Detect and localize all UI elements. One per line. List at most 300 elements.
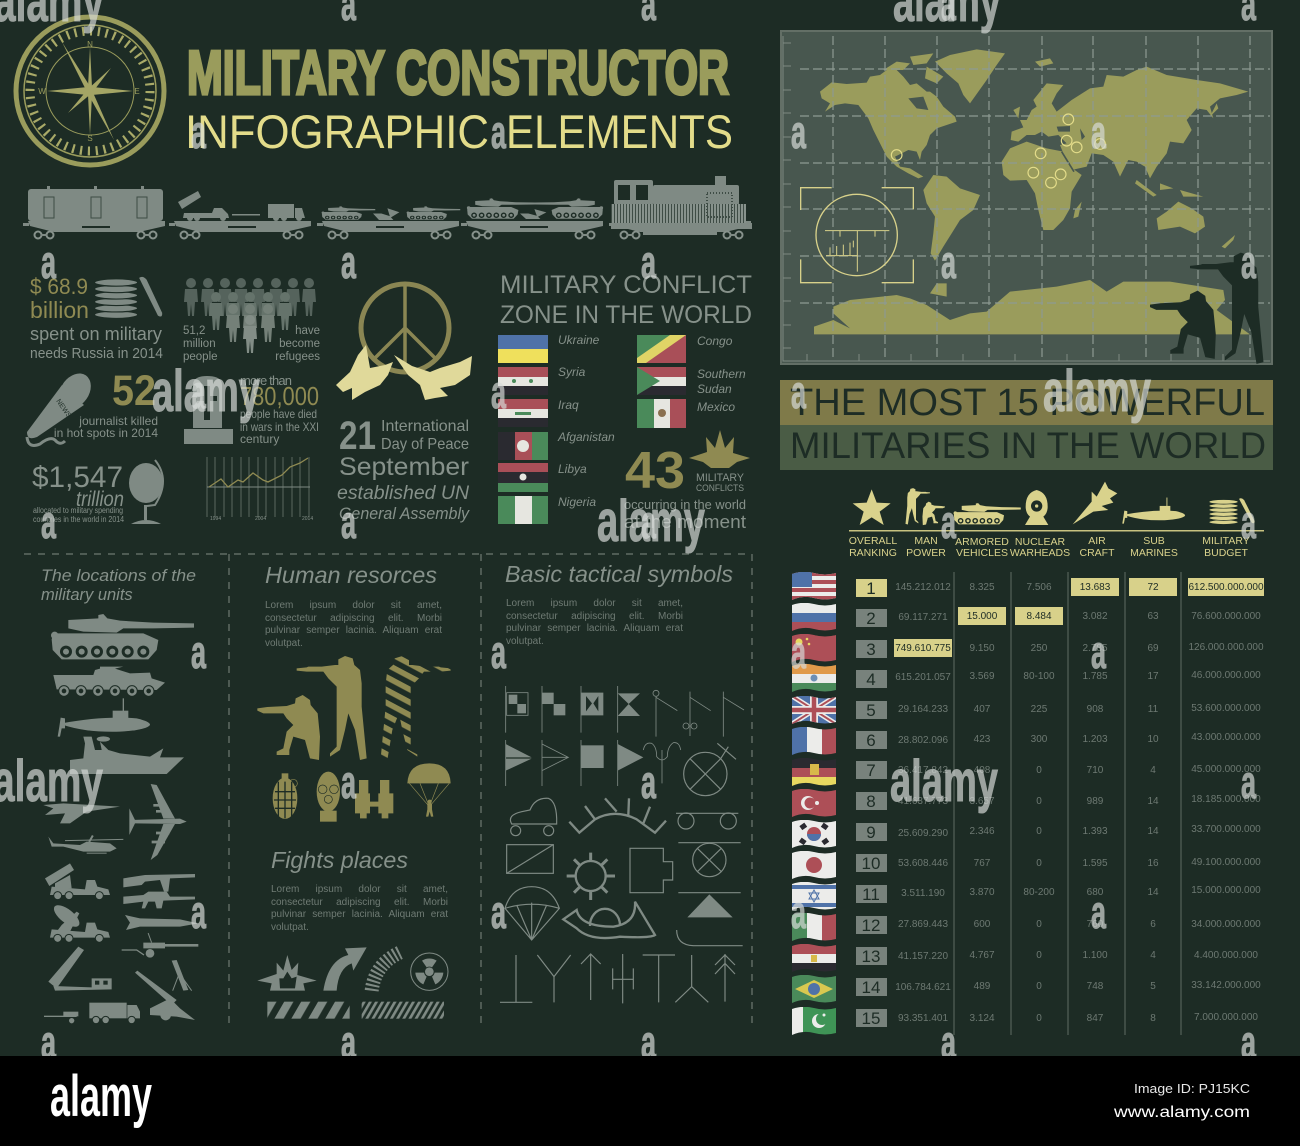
row 8: Turkey: 41.637.773 xyxy=(898,796,948,807)
icon: submarine xyxy=(58,698,150,737)
text: lorem ipsum xyxy=(271,884,448,936)
footer logo: alamy xyxy=(50,1064,152,1129)
solid triangle symbol xyxy=(687,894,733,917)
row 13: Egypt: 41.157.220 xyxy=(898,951,948,962)
large watermarks: alamy xyxy=(1043,359,1151,424)
small watermarks: a xyxy=(191,626,206,678)
row 8: Turkey: 3.657 xyxy=(969,796,995,807)
flag labels: Southern xyxy=(697,367,746,381)
stat: 1,547 trillion: allocated to military spending xyxy=(33,506,123,515)
small watermarks: a xyxy=(1091,886,1106,938)
stat: 780,000 died: in wars in the XXI xyxy=(240,420,319,434)
large watermarks xyxy=(0,0,1151,814)
stat: 68.9 billion Russia xyxy=(30,274,163,362)
small watermarks: a xyxy=(791,886,806,938)
row 6: France xyxy=(792,727,1261,755)
world map continents xyxy=(814,49,1250,334)
small watermarks: a xyxy=(641,236,656,288)
row 3: China: 126.000.000.000 xyxy=(1188,642,1264,653)
row 3: China: 749.610.775 xyxy=(895,643,951,654)
row 10: Japan: 10 xyxy=(862,854,880,873)
table column headers: ARMORED xyxy=(955,536,1009,548)
heading: locations xyxy=(41,567,196,604)
footer bar xyxy=(0,1056,1300,1146)
row 13: Egypt: 1.100 xyxy=(1082,950,1108,961)
row 11: Israel: 14 xyxy=(1147,887,1159,898)
row 4: India: 80-100 xyxy=(1023,671,1055,682)
text: international day of peace: International xyxy=(381,418,469,435)
icon: aircraft xyxy=(1073,482,1117,524)
row 2: Russia: 63 xyxy=(1147,611,1159,622)
flag labels: Libya xyxy=(558,462,587,476)
small watermarks: a xyxy=(1241,1016,1256,1068)
stat: 52 journalists: journalist killed xyxy=(78,414,158,428)
heading: military conflict zone: ZONE IN THE WORLD xyxy=(500,301,752,329)
text: international day of peace xyxy=(337,414,470,523)
footer url: www.alamy.com xyxy=(1113,1104,1250,1121)
gun sight scope xyxy=(801,188,913,283)
icon: star xyxy=(853,489,891,525)
row 3: China: 3 xyxy=(866,640,876,659)
stat: 52 journalists xyxy=(54,367,158,440)
row 2: Russia xyxy=(792,603,1261,631)
table column headers xyxy=(849,535,1250,559)
table column headers: RANKING xyxy=(849,547,897,559)
table rows xyxy=(792,572,1264,1035)
heading: basic tactical symbols: Basic tactical symbols xyxy=(505,561,733,587)
row 15: Pakistan: 0 xyxy=(1036,1013,1042,1024)
icon: fighter jet xyxy=(43,803,120,823)
row 9: South Korea xyxy=(792,820,1261,848)
row 9: South Korea: 25.609.290 xyxy=(898,828,948,839)
row 5: United Kingdom: 11 xyxy=(1148,704,1159,715)
row 11: Israel: 80-200 xyxy=(1023,887,1055,898)
icon: peace sign xyxy=(361,284,449,372)
row 6: France: 6 xyxy=(866,731,876,750)
row 2: Russia: 3.082 xyxy=(1082,611,1108,622)
row 6: France: 10 xyxy=(1147,734,1159,745)
refugees text: refugees xyxy=(275,351,320,363)
row 1: United States: 8.325 xyxy=(969,582,995,593)
stat: 1,547 trillion: countries in the world in 2014 xyxy=(33,515,124,524)
row 13: Egypt: 0 xyxy=(1036,950,1042,961)
icon: assault rifle xyxy=(123,892,195,908)
stat: 52 journalists: 52 xyxy=(112,367,156,415)
row 2: Russia: 69.117.271 xyxy=(898,612,948,623)
flag: Iraq xyxy=(498,399,548,427)
icon: camouflage soldier xyxy=(381,656,451,760)
train locomotive xyxy=(609,176,752,238)
stat: 68.9 billion Russia: billion xyxy=(30,297,89,323)
flag symbols row 2 xyxy=(506,740,736,796)
small watermarks: a xyxy=(1241,756,1256,808)
icon: doves xyxy=(336,345,472,400)
row 3: China: 69 xyxy=(1147,643,1159,654)
row 5: United Kingdom: 5 xyxy=(866,701,876,720)
row 11: Israel xyxy=(792,882,1261,910)
row 5: United Kingdom: 908 xyxy=(1087,704,1104,715)
text: lorem ipsum: Lorem ipsum dolor sit amet, xyxy=(271,884,448,895)
icon: binoculars xyxy=(355,780,393,818)
row 12: Italy: 0 xyxy=(1036,919,1042,930)
row 12: Italy: 6 xyxy=(1150,919,1156,930)
icon: truck towing gun xyxy=(44,1003,140,1024)
stat: 43 conflicts: CONFLICTS xyxy=(696,483,744,493)
table column headers: MAN xyxy=(914,535,938,547)
flag labels xyxy=(557,333,746,509)
row 5: United Kingdom: 29.164.233 xyxy=(898,704,948,715)
heading: fights places: Fights places xyxy=(271,847,408,873)
icon: compass: E xyxy=(134,87,140,96)
row 13: Egypt: 13 xyxy=(862,947,880,966)
row 4: India: 3.569 xyxy=(969,671,995,682)
row 14: Brazil: 14 xyxy=(862,978,880,997)
row 3: China: 2.785 xyxy=(1082,643,1108,654)
refugees text: million xyxy=(183,338,216,350)
small watermarks: a xyxy=(641,1016,656,1068)
row 6: France: 423 xyxy=(974,734,991,745)
row 5: United Kingdom xyxy=(792,696,1261,724)
icon: warship xyxy=(70,736,184,774)
icon: rocket xyxy=(125,915,198,930)
table column headers: MILITARY xyxy=(1202,535,1250,547)
military vehicle icons xyxy=(43,614,198,1024)
text: lorem ipsum: volutpat. xyxy=(265,638,303,649)
refugees text: people xyxy=(183,351,218,363)
row 7: Germany: 710 xyxy=(1087,765,1104,776)
stat: 1,547 trillion xyxy=(32,461,124,524)
icon: missile launcher truck xyxy=(48,947,112,991)
stat: 68.9 billion Russia: needs Russia in 2014 xyxy=(30,345,163,362)
icon: tank xyxy=(954,503,1021,524)
icon: compass xyxy=(16,17,164,165)
icon: gravestone xyxy=(184,376,233,444)
row 4: India: 1.785 xyxy=(1082,671,1108,682)
row 11: Israel: 3.511.190 xyxy=(901,888,945,899)
large watermarks: alamy xyxy=(597,489,705,554)
small watermarks: a xyxy=(791,366,806,418)
row 1: United States xyxy=(792,572,1264,600)
table column headers: SUB xyxy=(1143,535,1165,547)
row 10: Japan: 53.608.446 xyxy=(898,858,948,869)
small watermarks: a xyxy=(791,106,806,158)
row 4: India: 4 xyxy=(866,670,876,689)
icon: explosion xyxy=(689,430,750,468)
stat: 43 conflicts xyxy=(624,430,750,532)
small watermarks: a xyxy=(641,496,656,548)
large watermarks: alamy xyxy=(152,359,260,424)
row 7: Germany xyxy=(792,758,1261,786)
row 4: India xyxy=(792,664,1261,692)
text: lorem ipsum: pulvinar semper lacinia. Aliquam erat xyxy=(265,625,442,636)
table column headers: WARHEADS xyxy=(1010,547,1070,559)
row 8: Turkey: 8 xyxy=(866,792,876,811)
flag labels: Nigeria xyxy=(558,495,596,509)
stat: 1,547 trillion: $1,547 xyxy=(32,461,123,494)
small watermarks: a xyxy=(41,496,56,548)
text: lorem ipsum: consectetur adipiscing elit. Morbi xyxy=(506,611,683,622)
footer image id: Image ID: PJ15KC xyxy=(1134,1081,1250,1096)
row 6: France: 43.000.000.000 xyxy=(1191,732,1261,743)
row 3: China xyxy=(792,634,1264,662)
icon: globe xyxy=(129,460,163,524)
icon: striped arc xyxy=(372,952,402,991)
icon: submarine xyxy=(1122,498,1185,524)
row 5: United Kingdom: 407 xyxy=(974,704,991,715)
row 15: Pakistan: 93.351.401 xyxy=(898,1013,948,1024)
row 14: Brazil xyxy=(792,975,1261,1003)
row 3: China: 250 xyxy=(1031,643,1048,654)
text: international day of peace: established UN xyxy=(337,483,469,504)
stat: 780,000 died: century xyxy=(240,432,279,446)
row 7: Germany: 0 xyxy=(1036,765,1042,776)
row 12: Italy xyxy=(792,913,1261,941)
icon: explosion xyxy=(257,955,317,991)
row 9: South Korea: 9 xyxy=(866,823,876,842)
flag: Nigeria xyxy=(498,496,548,524)
icon: rocket launcher truck xyxy=(45,863,110,900)
row 1: United States: 72 xyxy=(1147,582,1159,593)
row 12: Italy: 27.869.443 xyxy=(898,919,948,930)
icon: curved arrow xyxy=(323,947,367,991)
row 1: United States: 145.212.012 xyxy=(895,582,951,593)
heading: the most 15 powerful militaries: MILITARIES IN THE WORLD xyxy=(790,425,1266,466)
row 1: United States: 1 xyxy=(866,579,876,598)
row 14: Brazil: 0 xyxy=(1036,981,1042,992)
table column headers: NUCLEAR xyxy=(1015,536,1066,548)
stat: 68.9 billion Russia: $ 68.9 xyxy=(30,274,88,299)
icon: radar truck xyxy=(50,901,110,942)
hazard stripes narrow xyxy=(362,1002,444,1019)
row 14: Brazil: 33.142.000.000 xyxy=(1191,980,1261,991)
small watermarks: a xyxy=(341,756,356,808)
stat: 780,000 died: 780,000 xyxy=(240,381,319,411)
row 15: Pakistan xyxy=(792,1007,1258,1035)
heading: the most 15 powerful militaries: THE MOST 15 POWERFUL xyxy=(790,382,1265,424)
row 4: India: 17 xyxy=(1147,671,1159,682)
icon: tank xyxy=(51,614,194,659)
row 7: Germany: 36.417.842 xyxy=(898,765,948,776)
line chart xyxy=(207,457,313,522)
row 13: Egypt xyxy=(792,944,1258,972)
icon: parachutist xyxy=(407,763,451,817)
table column headers: BUDGET xyxy=(1204,547,1248,559)
icon: soldiers xyxy=(905,488,945,525)
icon: armored vehicle xyxy=(53,667,165,696)
row 8: Turkey xyxy=(792,789,1261,817)
small watermarks: a xyxy=(41,236,56,288)
hazard stripes wide xyxy=(267,1002,350,1019)
conflict markers xyxy=(891,114,1105,188)
icon: gas mask xyxy=(317,772,340,822)
military train xyxy=(23,176,752,238)
fights places icons xyxy=(257,947,448,1019)
row 11: Israel: 3.870 xyxy=(969,887,995,898)
title: INFOGRAPHIC xyxy=(185,105,489,158)
icon: compass: S xyxy=(87,134,93,143)
row 11: Israel: 680 xyxy=(1087,887,1104,898)
text: international day of peace: Day of Peace xyxy=(381,436,469,453)
text: international day of peace: General Assembly xyxy=(339,504,470,523)
small watermarks: a xyxy=(191,366,206,418)
table column headers: MARINES xyxy=(1130,547,1178,559)
small watermarks: a xyxy=(641,756,656,808)
icon: grenade xyxy=(273,773,297,819)
row 9: South Korea: 14 xyxy=(1147,826,1159,837)
row 2: Russia: 2 xyxy=(866,609,876,628)
flag labels: Congo xyxy=(697,334,733,348)
stat: 68.9 billion Russia: spent on military xyxy=(30,324,162,344)
text: lorem ipsum: consectetur adipiscing elit. Morbi xyxy=(271,897,448,908)
small watermarks: a xyxy=(491,886,506,938)
icon: kneeling soldier xyxy=(257,695,320,760)
row 13: Egypt: 4.767 xyxy=(969,950,995,961)
row 9: South Korea: 1.393 xyxy=(1082,826,1108,837)
row 8: Turkey: 14 xyxy=(1147,796,1159,807)
row 5: United Kingdom: 53.600.000.000 xyxy=(1191,703,1261,714)
icon: howitzer xyxy=(122,933,198,958)
small watermarks: a xyxy=(41,1016,56,1068)
text: lorem ipsum: volutpat. xyxy=(271,922,309,933)
icon: field artillery xyxy=(135,971,195,1020)
small watermarks: a xyxy=(941,1016,956,1068)
small watermarks: a xyxy=(941,236,956,288)
row 3: China: 9.150 xyxy=(969,643,995,654)
icon: compass: W xyxy=(38,87,46,96)
icon: machine gun xyxy=(123,874,195,892)
heading: locations: military units xyxy=(41,586,133,604)
heading: human resorces: Human resorces xyxy=(265,562,438,588)
row 4: India: 615.201.057 xyxy=(895,672,951,683)
row 10: Japan: 1.595 xyxy=(1082,858,1108,869)
row 14: Brazil: 106.784.621 xyxy=(895,982,951,993)
text: lorem ipsum: Lorem ipsum dolor sit amet, xyxy=(265,600,442,611)
row 1: United States: 13.683 xyxy=(1080,582,1111,593)
row 6: France: 300 xyxy=(1031,734,1048,745)
unit symbols xyxy=(505,798,743,946)
line chart: 1994 xyxy=(210,516,221,522)
row 2: Russia: 76.600.000.000 xyxy=(1191,611,1261,622)
stat: 43 conflicts: occurring in the world xyxy=(624,497,746,512)
small watermarks: a xyxy=(341,236,356,288)
panel: basic tactical symbols xyxy=(500,561,744,1003)
small watermarks: a xyxy=(1241,496,1256,548)
row 8: Turkey: 18.185.000.000 xyxy=(1191,794,1261,805)
flag: Mexico xyxy=(637,399,686,428)
heading: military conflict zone: MILITARY CONFLICT xyxy=(500,271,752,299)
row 8: Turkey: 989 xyxy=(1087,796,1104,807)
row 11: Israel: 11 xyxy=(862,885,880,904)
small watermarks: a xyxy=(1091,106,1106,158)
flag labels: Afganistan xyxy=(557,430,615,444)
row 15: Pakistan: 8 xyxy=(1150,1013,1156,1024)
small watermarks: a xyxy=(341,496,356,548)
line chart: 2004 xyxy=(255,516,266,522)
line chart: 2014 xyxy=(302,516,313,522)
icon: helicopter xyxy=(48,835,123,854)
human resources icons xyxy=(257,656,451,822)
text: international day of peace: 21 xyxy=(339,414,376,458)
icon: news microphone: NEWS xyxy=(54,398,72,420)
row 10: Japan: 49.100.000.000 xyxy=(1191,857,1261,868)
row 4: India: 46.000.000.000 xyxy=(1191,670,1261,681)
row 14: Brazil: 5 xyxy=(1150,981,1156,992)
table column headers: VEHICLES xyxy=(956,547,1008,559)
title: MILITARY CONSTRUCTOR xyxy=(187,39,729,108)
train car: boxcar xyxy=(23,186,165,238)
table column headers: AIR xyxy=(1088,535,1106,547)
icon: refugee silhouettes xyxy=(184,278,316,353)
heading: locations: The locations of the xyxy=(41,567,196,585)
small watermarks: a xyxy=(941,496,956,548)
row 1: United States: 7.506 xyxy=(1026,582,1052,593)
title xyxy=(185,39,733,158)
panel: locations of military units xyxy=(41,567,198,1024)
row 11: Israel: 15.000.000.000 xyxy=(1191,885,1261,896)
flag labels: Mexico xyxy=(697,400,735,414)
row 7: Germany: 45.000.000.000 xyxy=(1191,764,1261,775)
row 12: Italy: 760 xyxy=(1087,919,1104,930)
row 1: United States: 612.500.000.000 xyxy=(1188,582,1264,593)
row 7: Germany: 408 xyxy=(974,765,991,776)
stat: 1,547 trillion: trillion xyxy=(76,488,124,511)
flag labels: Syria xyxy=(558,365,586,379)
small watermarks: a xyxy=(1091,626,1106,678)
row 13: Egypt: 4.400.000.000 xyxy=(1194,950,1258,961)
flag labels: Sudan xyxy=(697,382,732,396)
row 12: Italy: 12 xyxy=(862,916,880,935)
refugees text: 51,2 xyxy=(183,325,205,337)
icon: bomber xyxy=(129,784,187,860)
icon: mortar xyxy=(172,960,192,991)
soldier silhouettes on map xyxy=(1150,253,1263,364)
row 2: Russia: 8.484 xyxy=(1026,611,1052,622)
refugees text: become xyxy=(279,338,320,350)
small watermarks: a xyxy=(1241,236,1256,288)
small watermarks: a xyxy=(341,1016,356,1068)
small watermarks: a xyxy=(491,626,506,678)
row 15: Pakistan: 15 xyxy=(862,1009,880,1028)
icon: standing soldier xyxy=(297,656,367,760)
row 6: France: 28.802.096 xyxy=(898,735,948,746)
table column headers: OVERALL xyxy=(849,535,897,547)
heading: the most 15 powerful militaries xyxy=(780,380,1273,470)
text: lorem ipsum: Lorem ipsum dolor sit amet, xyxy=(506,598,683,609)
row 2: Russia: 15.000 xyxy=(967,611,998,622)
flag labels: Ukraine xyxy=(558,333,600,347)
icon: compass: N xyxy=(87,40,93,49)
row 15: Pakistan: 7.000.000.000 xyxy=(1194,1012,1258,1023)
stat: 780,000 died: more than xyxy=(240,373,292,388)
row 9: South Korea: 33.700.000.000 xyxy=(1191,824,1261,835)
text: lorem ipsum: pulvinar semper lacinia. Aliquam erat xyxy=(271,909,448,920)
title: ELEMENTS xyxy=(506,105,733,158)
small watermarks: a xyxy=(491,106,506,158)
row 10: Japan: 767 xyxy=(974,858,991,869)
text: lorem ipsum: consectetur adipiscing elit. Morbi xyxy=(265,613,442,624)
table column icons xyxy=(853,482,1255,525)
stat: 780,000 died: people have died xyxy=(240,407,317,421)
icon: coins xyxy=(1209,498,1255,524)
icon: news microphone xyxy=(27,367,97,445)
row 12: Italy: 34.000.000.000 xyxy=(1191,919,1261,930)
train car: heavy tanks and gun xyxy=(461,198,603,238)
train car: rocket launcher and truck xyxy=(169,191,311,238)
text: lorem ipsum: volutpat. xyxy=(506,636,544,647)
row 10: Japan: 16 xyxy=(1147,858,1159,869)
branch symbols row xyxy=(500,954,735,1003)
world map panel xyxy=(780,30,1273,365)
